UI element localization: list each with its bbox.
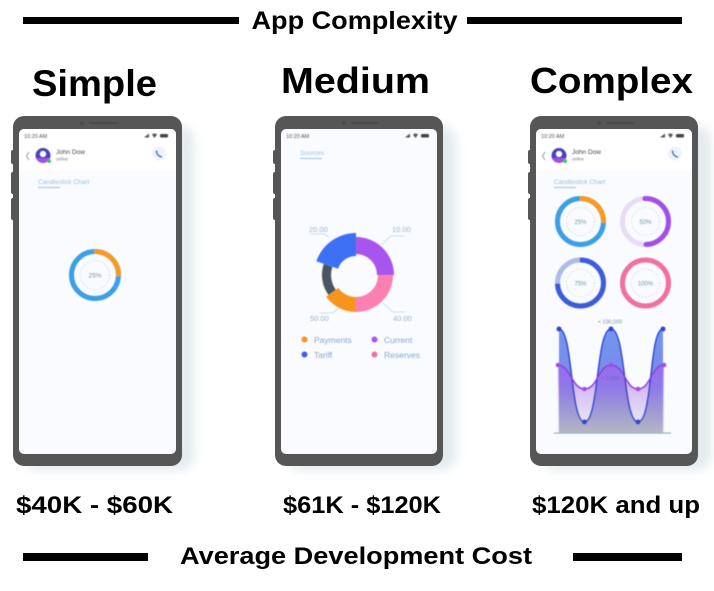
donut chart with exploded segments (316, 233, 394, 312)
panel: complex phone (528, 116, 711, 470)
panel: medium phone (273, 116, 456, 470)
price: simple: $40K - $60K (16, 492, 174, 519)
status bar (24, 133, 168, 140)
contact header (542, 146, 682, 163)
footer label: Average Development Cost (180, 543, 532, 570)
price: complex: $120K and up (532, 492, 700, 519)
value labels: 20.00 (309, 225, 328, 234)
heading: complex: Complex (530, 60, 693, 101)
contact header: John Dow (56, 149, 85, 156)
contact header (26, 146, 166, 163)
contact header: John Dow (572, 149, 601, 156)
heading: medium: Medium (281, 60, 430, 101)
panel: simple phone (11, 116, 194, 470)
callout lines (311, 234, 405, 313)
donut 100% (622, 260, 668, 306)
donut chart 25% (72, 252, 118, 298)
bottom rule right (573, 553, 682, 561)
status bar: 10:20 AM (541, 134, 565, 140)
contact header: online (572, 156, 585, 162)
legend (302, 335, 420, 360)
donut 75% (558, 260, 604, 306)
donut 25%: 25% (574, 220, 587, 226)
bottom rule left (23, 553, 148, 561)
donut 25% (558, 198, 604, 244)
top rule right (467, 17, 682, 24)
status bar (541, 133, 684, 140)
value labels (309, 225, 412, 323)
area chart: + 2,000 (601, 376, 620, 382)
value labels: 10.00 (392, 225, 411, 234)
donut chart 25%: 25% (88, 272, 102, 280)
donut 75%: 75% (574, 282, 587, 288)
status bar (286, 133, 429, 140)
contact header: online (56, 156, 69, 162)
legend: Payments (314, 335, 352, 345)
legend: Reserves (384, 350, 420, 360)
chart title: Candlestick Chart (38, 179, 89, 186)
status bar: 10:20 AM (24, 134, 48, 140)
heading: simple: Simple (32, 63, 157, 104)
chart title: Candlestick Chart (554, 179, 605, 186)
sources heading: Sources (300, 150, 325, 157)
donut 50% (622, 198, 668, 244)
value labels: 50.00 (310, 314, 329, 323)
status bar: 10:20 AM (286, 134, 310, 140)
area chart (554, 320, 671, 434)
price: medium: $61K - $120K (283, 492, 442, 519)
donut 50%: 50% (639, 220, 652, 226)
legend: Tariff (314, 350, 333, 360)
title: App Complexity (252, 7, 458, 35)
legend: Current (384, 335, 413, 345)
donut 100%: 100% (638, 282, 654, 288)
top rule left (23, 17, 239, 24)
value labels: 40.00 (393, 314, 412, 323)
area chart: + 100,000 (598, 320, 622, 326)
